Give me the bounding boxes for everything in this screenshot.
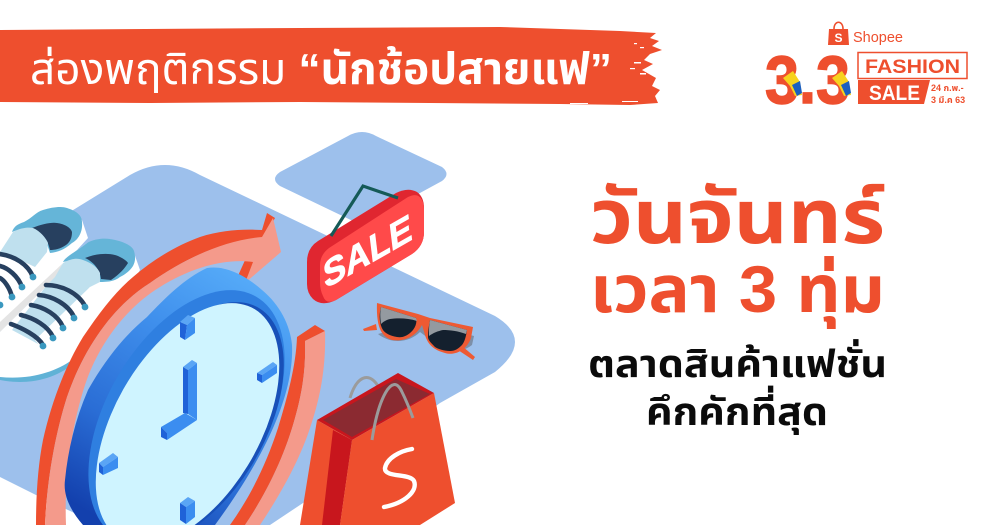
arrow salmon band bbox=[45, 218, 281, 525]
platform: main blue diamond bbox=[0, 165, 515, 525]
clock hands bbox=[161, 360, 197, 440]
clock inner dark edge bbox=[100, 302, 284, 525]
clock tick: top bbox=[180, 315, 195, 340]
right shoe eyelets bbox=[40, 304, 88, 349]
logo: Shopee 3.3 Fashion Sale bbox=[765, 22, 967, 118]
left shoe toe cap bbox=[12, 207, 82, 253]
sunglasses arms bbox=[363, 324, 475, 360]
bag S logo bbox=[384, 449, 415, 507]
left lens bbox=[380, 307, 416, 337]
arrow: circular orange arrow bbox=[36, 213, 325, 525]
clock face bbox=[96, 303, 279, 525]
arrow head lower barb bbox=[237, 258, 256, 283]
clock tick: left bbox=[99, 453, 118, 475]
banner brush shape bbox=[0, 27, 662, 105]
left shoe tongue bbox=[0, 228, 48, 267]
icon: shopping bag bbox=[300, 373, 455, 525]
banner title text: ส่องพฤติกรรม “นักช้อปสายแฟ” bbox=[30, 45, 612, 94]
arrow outer orange edge bbox=[36, 213, 275, 525]
icon: colour patch second 3 bbox=[832, 71, 851, 96]
arrow right orange edge bbox=[230, 325, 325, 525]
sale dates bbox=[931, 83, 965, 105]
icon: Shopee bag bbox=[828, 22, 849, 45]
bag front panel bbox=[340, 393, 455, 525]
right shoe inner dark bbox=[85, 254, 128, 280]
sunglasses frame bbox=[377, 303, 473, 354]
clock ring silhouette bbox=[65, 267, 292, 525]
right shoe laces bbox=[11, 285, 85, 345]
sign hanger bbox=[331, 186, 398, 236]
sign side bbox=[307, 190, 424, 303]
right shoe toe cap bbox=[63, 239, 135, 282]
Sale banner: SALE bbox=[869, 82, 920, 105]
subheading line one: ตลาดสินค้าแฟชั่น bbox=[588, 338, 887, 386]
bag front handle bbox=[372, 385, 413, 440]
bag red fold bbox=[322, 430, 352, 525]
icon: sale sign bbox=[307, 186, 424, 303]
sale dates: 3 มี.ค 63 bbox=[931, 95, 965, 105]
sale dates: 24 ก.พ.- bbox=[931, 83, 964, 93]
Fashion box bbox=[858, 52, 967, 78]
clock tick: right bbox=[257, 362, 277, 383]
banner: brush stroke title bbox=[0, 27, 662, 105]
sign SALE text: SALE bbox=[321, 205, 414, 297]
icon: colour patch first 3 bbox=[783, 71, 802, 96]
right shoe blue sole bbox=[0, 340, 75, 382]
arrow right salmon band bbox=[245, 331, 325, 525]
Shopee wordmark: Shopee bbox=[853, 29, 903, 46]
headline: time: เวลา 3 ทุ่ม bbox=[590, 252, 885, 329]
icon: sneakers bbox=[0, 207, 140, 382]
left shoe laces bbox=[0, 254, 33, 297]
icon: sunglasses bbox=[363, 303, 475, 360]
illustration: isometric shopping scene bbox=[0, 132, 515, 525]
left shoe grey sole bbox=[0, 246, 84, 332]
right lens bbox=[428, 320, 467, 351]
right shoe body bbox=[0, 239, 140, 378]
clock inner wall bbox=[88, 290, 285, 525]
icon: clock bbox=[65, 267, 292, 525]
left shoe inner dark bbox=[32, 223, 72, 250]
bag interior bbox=[317, 373, 434, 440]
bag left panel bbox=[300, 420, 352, 525]
headline: day: วันจันทร์ bbox=[590, 175, 885, 260]
Fashion box: FASHION bbox=[865, 57, 960, 78]
clock tick: bottom bbox=[180, 497, 195, 524]
icon: Shopee bag: S bbox=[834, 31, 843, 45]
sunglasses shadow bbox=[378, 322, 474, 351]
subheading line two: คึกคักที่สุด bbox=[646, 385, 828, 435]
headline text block bbox=[588, 175, 887, 435]
banner brush flecks bbox=[570, 43, 646, 104]
right shoe white lace strips bbox=[35, 287, 100, 352]
sign front bbox=[320, 195, 424, 302]
left shoe body bbox=[0, 208, 88, 332]
platform: small blue diamond bbox=[275, 132, 446, 222]
left shoe eyelets bbox=[0, 274, 36, 308]
3.3 numerals: 3.3 bbox=[765, 42, 850, 118]
right shoe tongue bbox=[12, 259, 100, 345]
bag back handle bbox=[350, 377, 378, 398]
